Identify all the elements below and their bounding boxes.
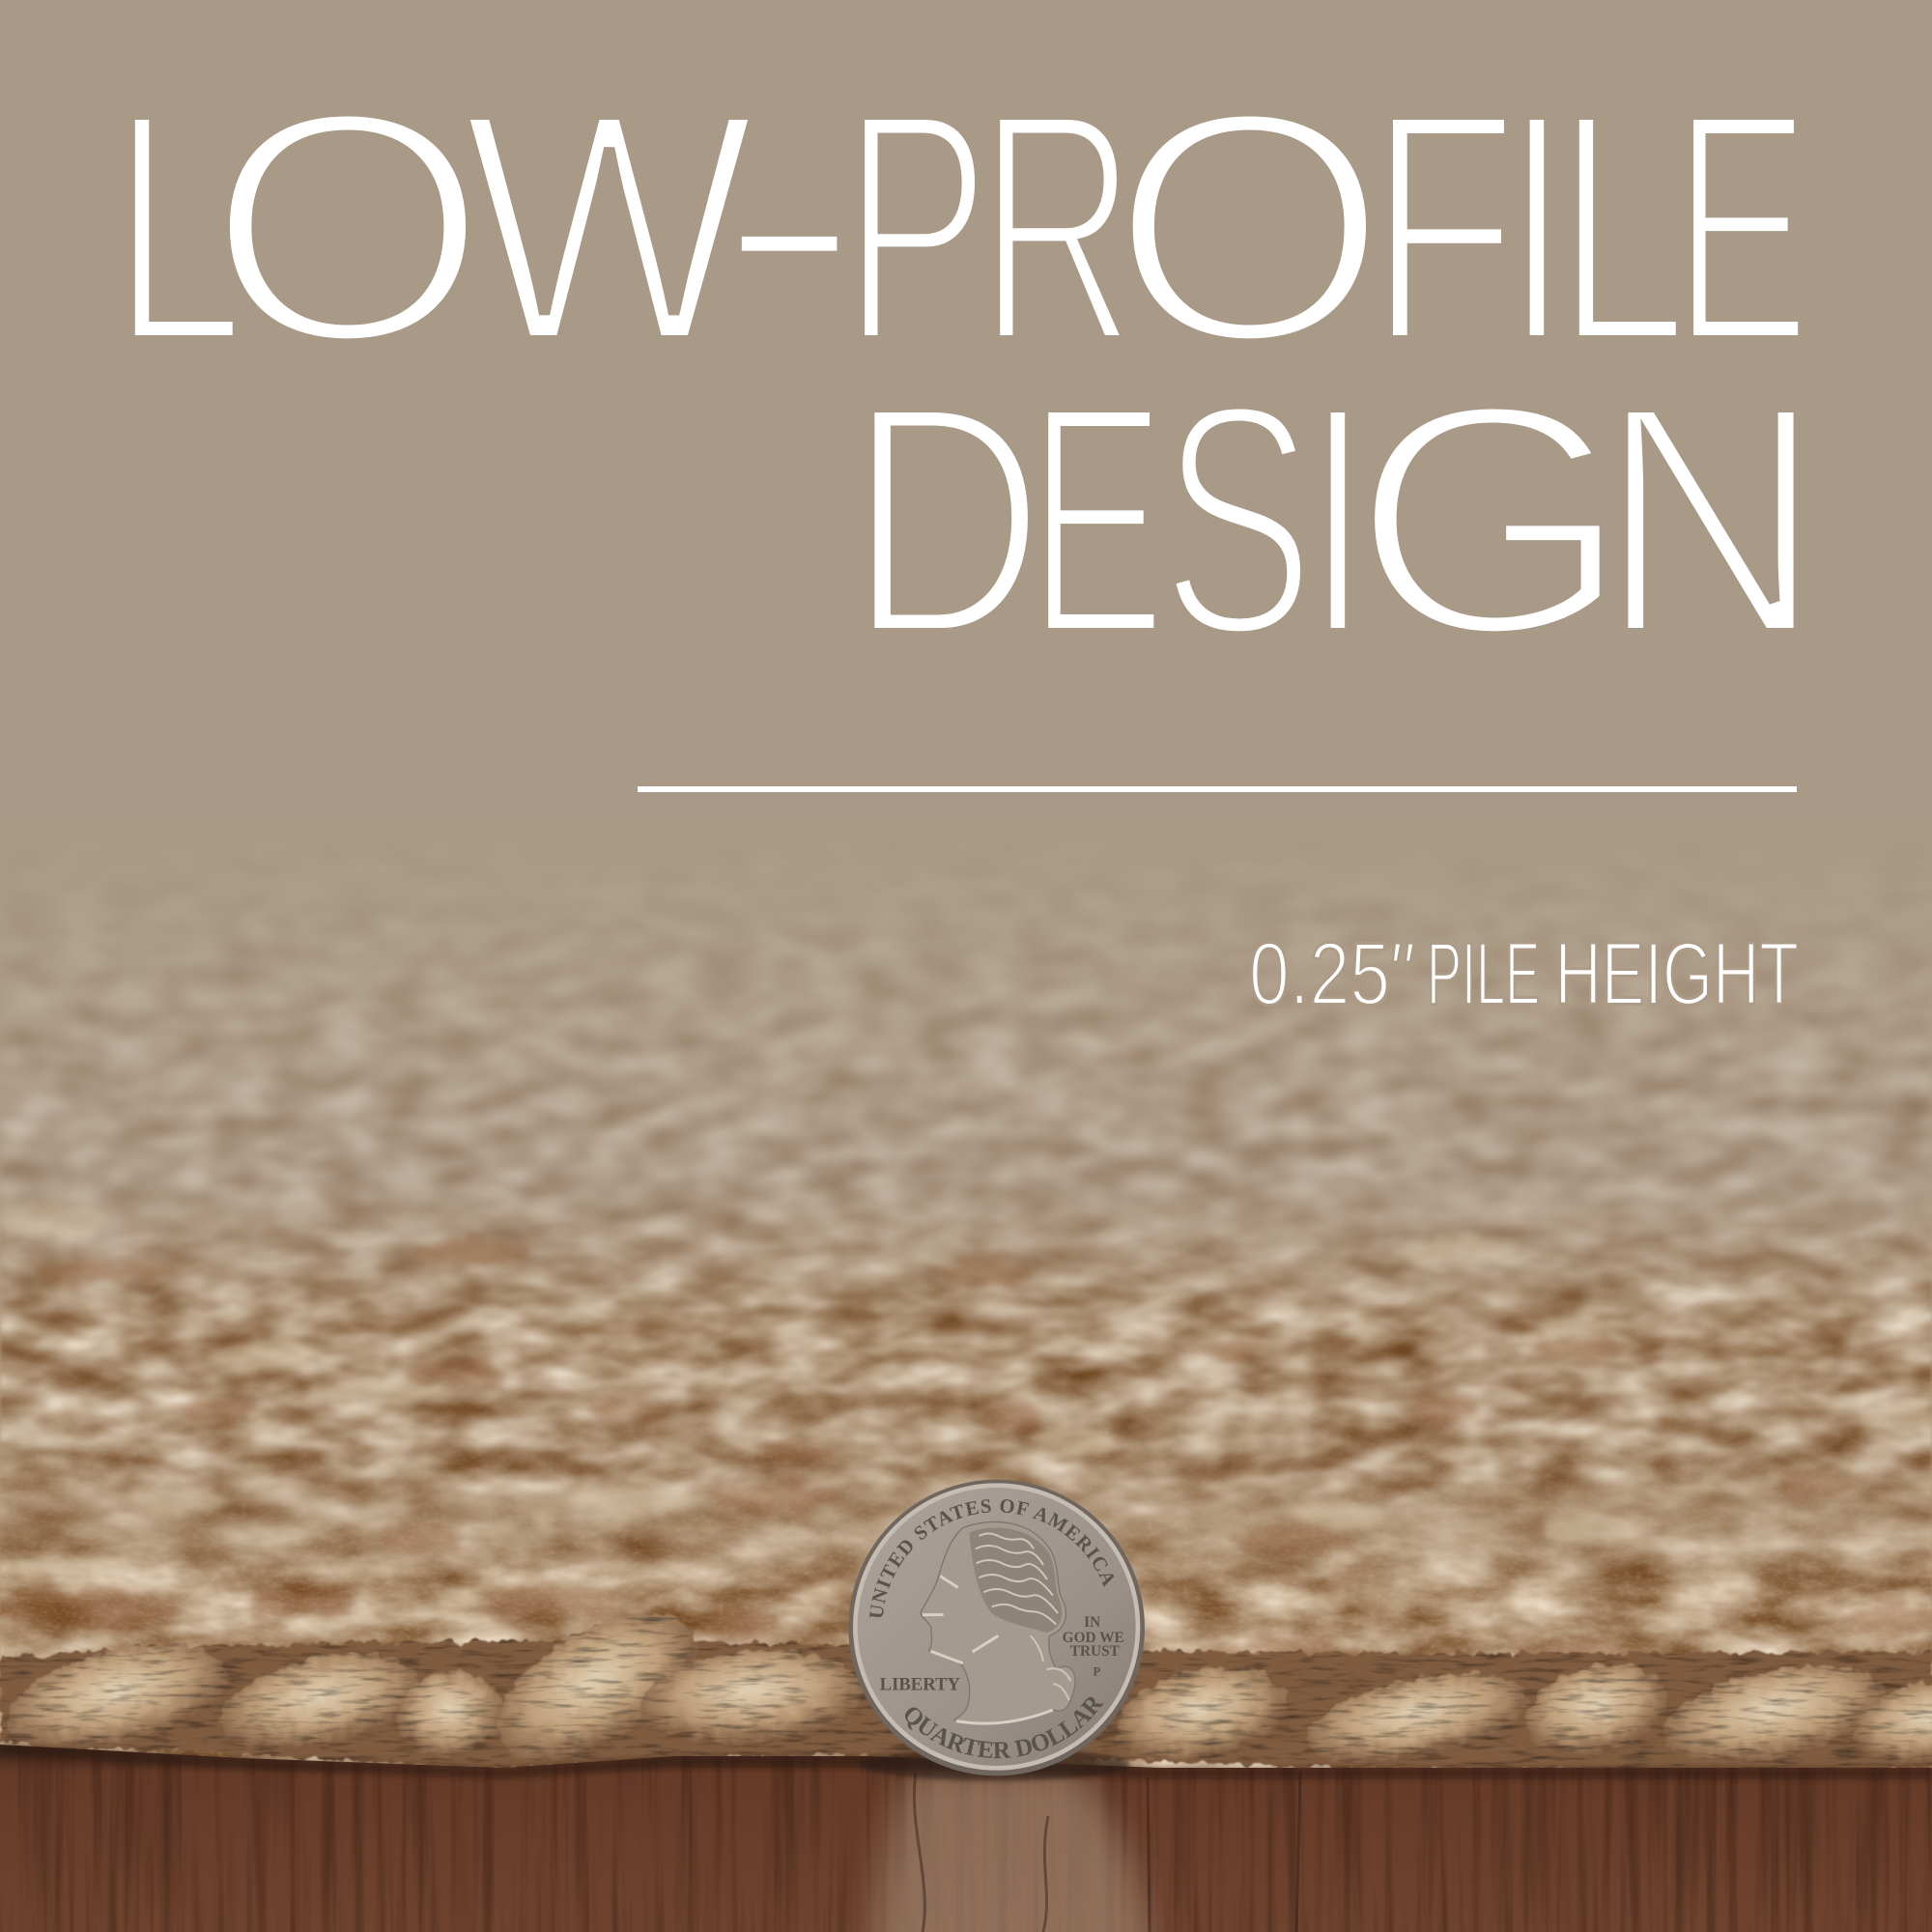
subtitle: 0.25" pile height [1249, 923, 1799, 1023]
rug: frayed braid edge twists [0, 1583, 1932, 1793]
coin inscription: IN GOD WE TRUST: GOD WE [1063, 1630, 1124, 1646]
coin inscription: IN GOD WE TRUST: TRUST [1070, 1643, 1120, 1660]
coin portrait: hair [969, 1527, 1062, 1633]
rug shadow on floor [0, 1745, 1932, 1779]
title: LOW-PROFILE: L [1555, 43, 1688, 412]
icon: US quarter coin for scale [848, 1480, 1145, 1783]
coin inscription: QUARTER DOLLAR: QUARTER DOLLAR [905, 1696, 1104, 1758]
coin face [858, 1488, 1136, 1766]
coin inscription: LIBERTY: LIBERTY [880, 1674, 961, 1694]
coin edge [848, 1480, 1145, 1776]
coin portrait: bust [921, 1521, 1075, 1723]
coin rim [853, 1483, 1140, 1771]
coin inscription: IN GOD WE TRUST [1063, 1614, 1124, 1679]
subtitle: 0.25" pile height: 0.25 [1249, 923, 1390, 1023]
title: LOW-PROFILE: O [1109, 42, 1389, 412]
title: LOW-PROFILE: - [714, 33, 866, 402]
title: LOW-PROFILE: L [111, 43, 244, 412]
coin inscription: IN GOD WE TRUST: P [1093, 1665, 1100, 1679]
floor plank seams [914, 1773, 1300, 1932]
rug texture: middle weave [0, 1190, 1932, 1550]
title: LOW-PROFILE [111, 33, 1810, 412]
rug texture: distant blurred weave [0, 910, 1932, 1277]
title: LOW-PROFILE: E [1673, 43, 1810, 412]
floor reflection of coin [869, 1768, 1154, 1932]
coin inscription: UNITED STATES OF AMERICA: UNITED STATES OF AMERICA [869, 1499, 1115, 1617]
coin inscription: IN GOD WE TRUST: IN [1084, 1614, 1100, 1631]
floor wood grain [0, 1739, 1932, 1932]
title: LOW-PROFILE: R [979, 43, 1137, 412]
subtitle: 0.25" pile height: HEIGHT [1555, 923, 1799, 1023]
subtitle: 0.25" pile height: PILE [1427, 924, 1540, 1023]
title: LOW-PROFILE: O [206, 43, 490, 412]
title: LOW-PROFILE: P [842, 43, 990, 412]
wood floor [0, 1739, 1932, 1932]
coin portrait: brow and jaw highlights [923, 1577, 1053, 1723]
rug blobs: brown weave gaps and light loops [0, 1200, 1932, 1690]
title: LOW-PROFILE: F [1369, 43, 1519, 412]
rug: fine fibre fuzz [0, 1434, 1932, 1758]
title: DESIGN: D [847, 334, 1045, 704]
divider rule [638, 786, 1797, 792]
title: DESIGN: I [1304, 335, 1372, 704]
title: DESIGN: N [1597, 334, 1825, 704]
title: DESIGN: S [1161, 335, 1315, 704]
subtitle: 0.25" pile height: " [1386, 924, 1414, 1023]
title: LOW-PROFILE: I [1503, 43, 1571, 412]
photo: jute braided rug [0, 910, 1932, 1768]
title: LOW-PROFILE: W [462, 43, 759, 412]
title: DESIGN [847, 334, 1825, 704]
title: DESIGN: E [1028, 336, 1166, 704]
coin shadow [860, 1748, 1130, 1780]
rug texture: near weave [0, 1468, 1932, 1777]
title: DESIGN: G [1350, 336, 1633, 704]
